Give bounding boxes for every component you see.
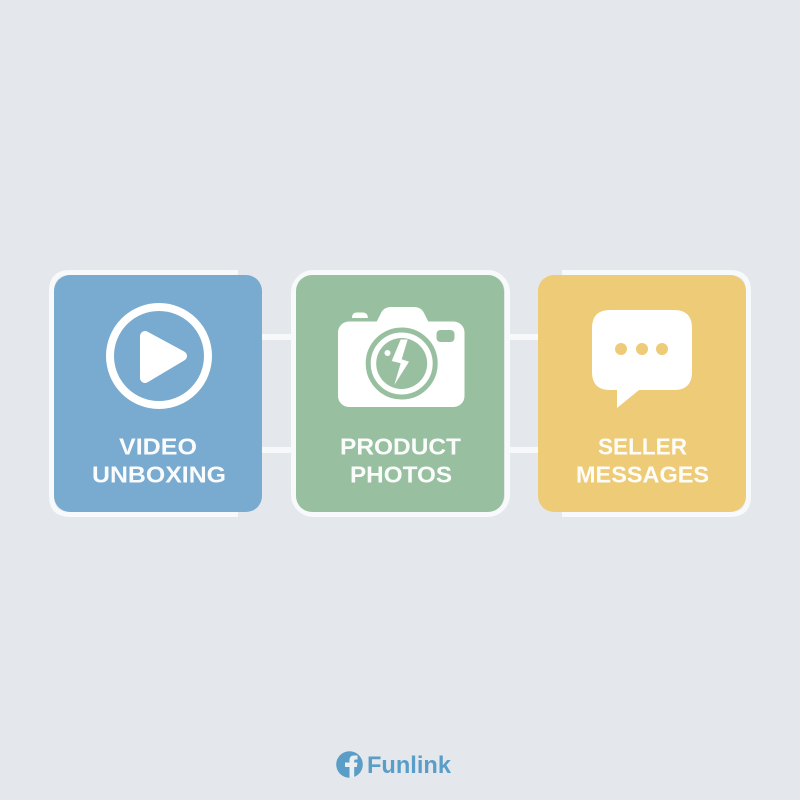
logo: Funlink: [336, 751, 452, 779]
connector: video to photos, bottom: [258, 447, 296, 453]
label: video unboxing: UNBOXING: [92, 462, 226, 488]
icon: facebook circle: [336, 751, 363, 778]
connector: photos to messages, top: [506, 334, 542, 340]
card fill: video: [54, 275, 262, 512]
icon: speech bubble: [592, 310, 692, 408]
card outline: photos: [294, 272, 508, 514]
label: product photos: PHOTOS: [350, 462, 452, 488]
label: video unboxing: VIDEO: [119, 434, 197, 460]
connector: video to photos, top: [258, 334, 296, 340]
panel: product photos: [294, 272, 508, 514]
panel: video unboxing: [52, 272, 262, 514]
card fill: messages: [538, 275, 746, 512]
label: seller messages: [576, 434, 709, 488]
label: seller messages: SELLER: [598, 434, 687, 460]
panel: seller messages: [538, 272, 748, 514]
card outline: video: [52, 272, 238, 514]
card fill: photos: [296, 275, 504, 512]
card outline: messages: [562, 272, 748, 514]
icon: play button: [110, 307, 208, 405]
icon: camera with flash: [338, 307, 464, 407]
label: seller messages: MESSAGES: [576, 462, 709, 488]
connector: photos to messages, bottom: [506, 447, 542, 453]
wordmark: Funlink: [367, 752, 452, 779]
label: product photos: PRODUCT: [340, 434, 462, 460]
label: product photos: [340, 434, 462, 488]
label: video unboxing: [92, 434, 226, 488]
